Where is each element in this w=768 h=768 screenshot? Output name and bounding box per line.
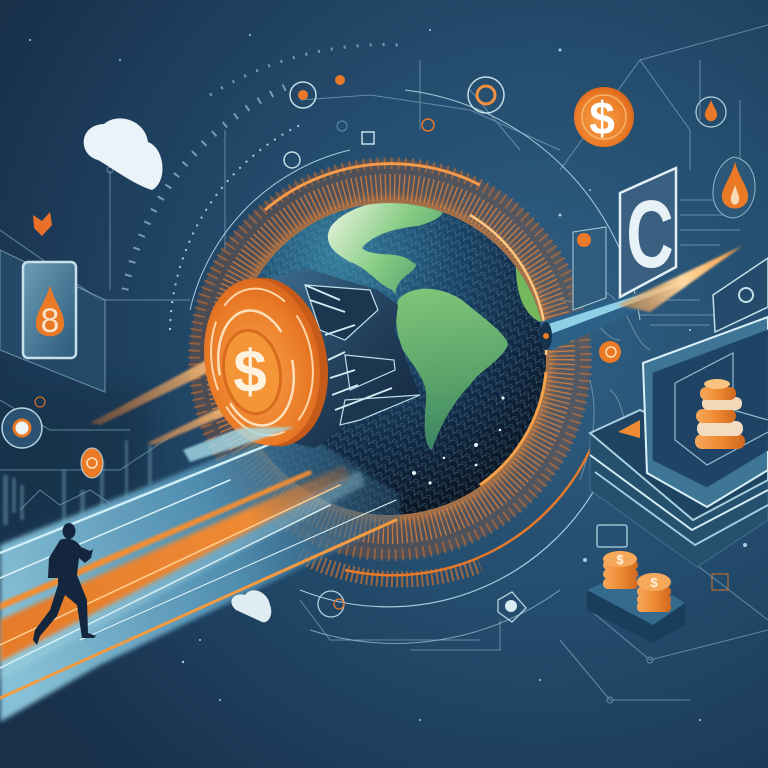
pedestal coin stacks: $ (650, 575, 658, 590)
card C (620, 168, 676, 297)
concentric dotted arcs (125, 45, 640, 643)
small orange gear upper left (33, 212, 52, 236)
card C: C (626, 182, 674, 288)
platform (590, 410, 768, 567)
continent: north america (328, 200, 443, 295)
monitor frame (643, 317, 768, 507)
pedestal coin stacks (587, 551, 685, 643)
small card (573, 227, 606, 310)
orange tick ring (194, 163, 590, 579)
left drop panel (0, 250, 105, 392)
right monitor stack (590, 258, 768, 567)
small drop top right (696, 97, 726, 127)
pedestal coin stacks: $ (616, 552, 624, 567)
tag panel (713, 258, 768, 332)
city bars left (3, 440, 152, 530)
coin face (191, 269, 333, 455)
orange node (599, 341, 621, 363)
cloud bottom (231, 590, 271, 622)
runner (33, 523, 96, 645)
continent: south america (396, 289, 508, 450)
globe (230, 199, 550, 519)
orange arrow (618, 420, 640, 438)
top-right dollar coin: $ (589, 92, 615, 144)
cloud upper left (84, 118, 163, 190)
cylinder body (265, 268, 420, 448)
monitor screen (653, 330, 768, 487)
tube with flare (540, 246, 742, 350)
top-right dollar coin (574, 87, 634, 147)
icons: left nodes (2, 397, 103, 478)
dollar sign: $ (233, 338, 267, 405)
drop icon top right (713, 157, 755, 218)
dark left haze (0, 390, 150, 530)
left drop panel: 8 (41, 302, 59, 340)
dollar coin cylinder (191, 268, 420, 456)
continent: edge land (516, 267, 542, 322)
bottom icons (318, 525, 728, 622)
shard below coin (183, 427, 295, 462)
coin stack (695, 379, 745, 449)
coin edge (199, 268, 341, 456)
globe specks (412, 396, 505, 485)
light speed streaks (0, 350, 400, 722)
top nodes (284, 75, 504, 168)
